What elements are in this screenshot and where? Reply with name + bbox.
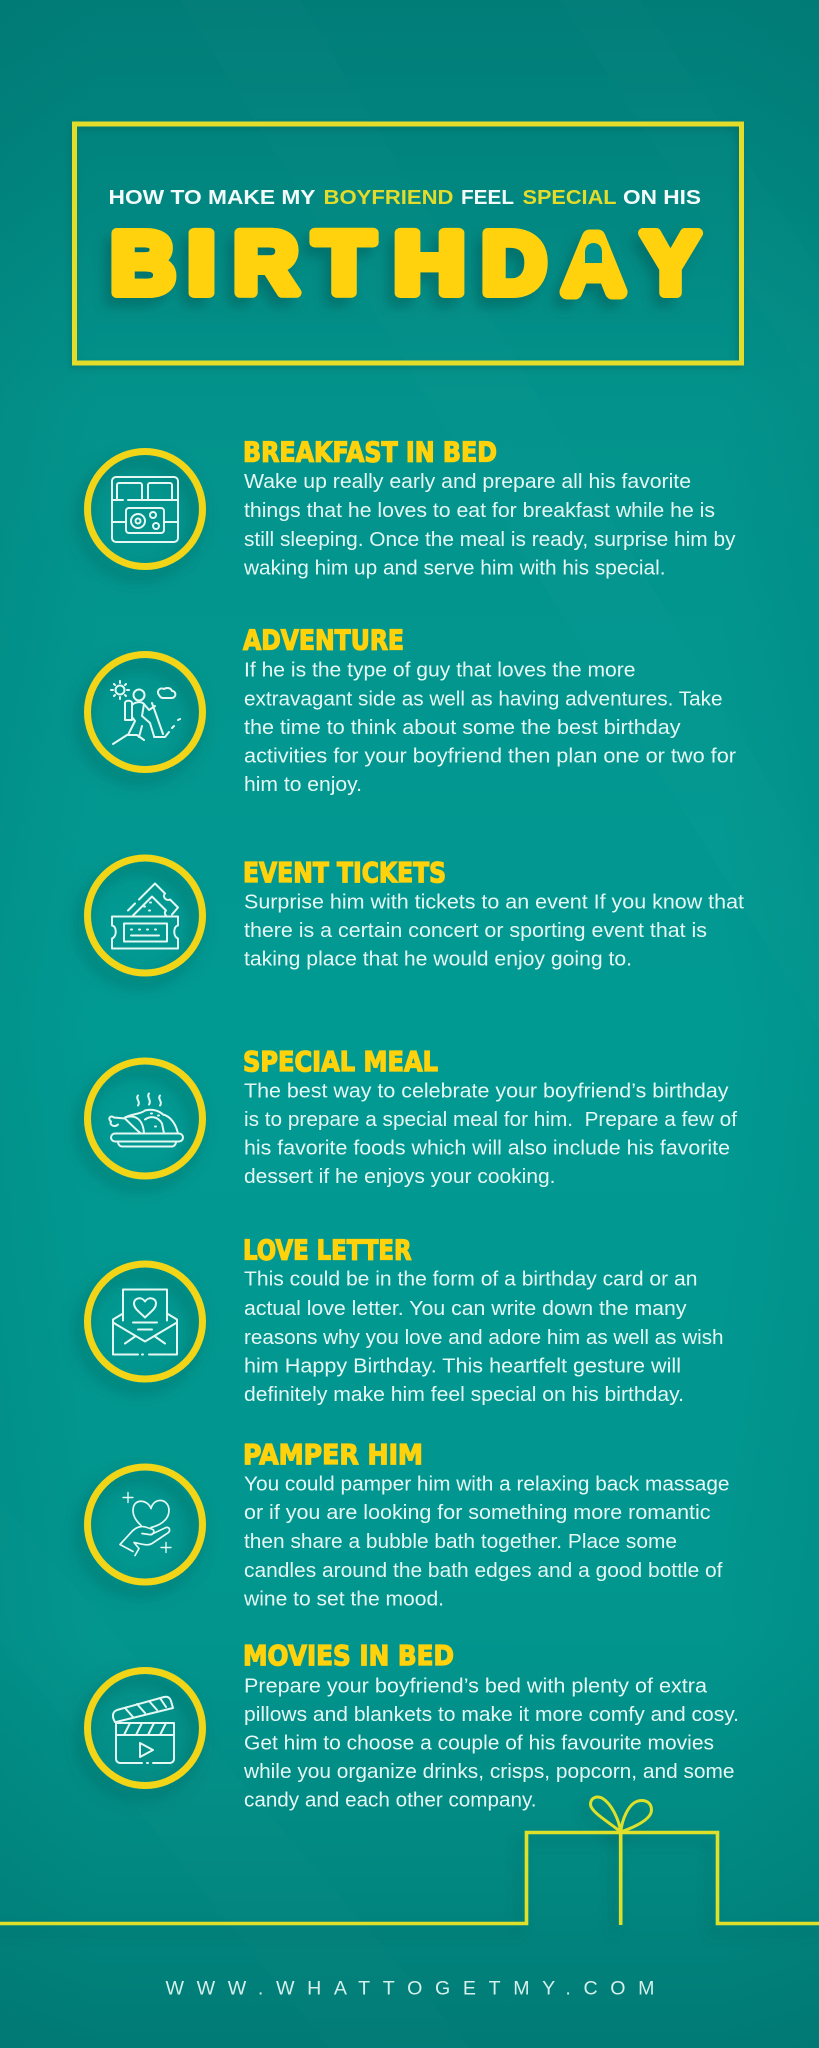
heading: BREAKFAST IN BED bbox=[243, 436, 497, 468]
panel: breakfast in bed bbox=[88, 436, 736, 580]
headline: birthday: B bbox=[111, 214, 175, 312]
body text: his favorite foods which will also include his favorite bbox=[244, 1138, 730, 1160]
heading: SPECIAL MEAL bbox=[243, 1046, 438, 1078]
subtitle: BOYFRIEND bbox=[324, 186, 454, 209]
gift bow bbox=[590, 1797, 652, 1832]
heading: EVENT TICKETS bbox=[243, 857, 446, 889]
icon: clapperboard bbox=[88, 1670, 202, 1786]
body text: him Happy Birthday. This heartfelt gesture will bbox=[244, 1356, 681, 1378]
body text: Prepare your boyfriend’s bed with plenty of extra bbox=[244, 1676, 708, 1698]
panel: love letter bbox=[88, 1234, 724, 1406]
body text: pillows and blankets to make it more comfy and cosy. bbox=[244, 1704, 739, 1726]
headline: birthday: H bbox=[394, 215, 465, 312]
body text bbox=[243, 1676, 739, 1812]
icon: roast meal bbox=[88, 1061, 202, 1176]
body text: This could be in the form of a birthday card or an bbox=[244, 1268, 698, 1290]
subtitle: FEEL bbox=[461, 186, 514, 209]
body text: taking place that he would enjoy going to. bbox=[244, 948, 632, 970]
body text: wine to set the mood. bbox=[243, 1588, 444, 1610]
body text: If he is the type of guy that loves the more bbox=[244, 660, 636, 682]
body text: activities for your boyfriend then plan one or two for bbox=[244, 746, 736, 768]
heading: MOVIES IN BED bbox=[243, 1640, 454, 1672]
body text: reasons why you love and adore him as well as wish bbox=[244, 1327, 724, 1349]
body text bbox=[244, 1080, 737, 1188]
body text: things that he loves to eat for breakfast while he is bbox=[244, 500, 715, 522]
website url: WWW.WHATTOGETMY.COM bbox=[166, 1978, 654, 2000]
headline: birthday bbox=[111, 214, 700, 312]
body text: Wake up really early and prepare all his favorite bbox=[244, 471, 691, 493]
title frame bbox=[74, 124, 742, 363]
body text: while you organize drinks, crisps, popcorn, and some bbox=[243, 1761, 734, 1783]
body text: is to prepare a special meal for him. Prepare a few of bbox=[244, 1109, 737, 1131]
heading: LOVE LETTER bbox=[243, 1234, 412, 1266]
headline: birthday: Y bbox=[641, 215, 700, 312]
headline: birthday: I bbox=[188, 214, 215, 312]
heading: ADVENTURE bbox=[243, 624, 404, 656]
body text bbox=[244, 660, 736, 796]
title box bbox=[74, 124, 742, 363]
panel: special meal bbox=[88, 1046, 737, 1188]
body text: there is a certain concert or sporting event that is bbox=[244, 920, 707, 942]
headline: birthday: T bbox=[314, 214, 374, 312]
headline: birthday: D bbox=[482, 214, 546, 312]
icon: bed with tray bbox=[88, 452, 202, 566]
panel: event tickets bbox=[88, 857, 744, 973]
body text: or if you are looking for something more romantic bbox=[244, 1502, 710, 1524]
icon: hiker bbox=[88, 654, 202, 770]
subtitle: SPECIAL bbox=[522, 186, 616, 209]
body text: then share a bubble bath together. Place some bbox=[244, 1531, 677, 1553]
heading: PAMPER HIM bbox=[243, 1439, 423, 1471]
icon: hand holding heart bbox=[88, 1467, 202, 1582]
body text: Get him to choose a couple of his favourite movies bbox=[244, 1732, 714, 1754]
body text: actual love letter. You can write down the many bbox=[244, 1298, 687, 1320]
body text: the time to think about some the best birthday bbox=[244, 717, 681, 739]
body text: candles around the bath edges and a good bottle of bbox=[244, 1560, 723, 1582]
panel: adventure bbox=[88, 624, 736, 796]
subtitle bbox=[108, 186, 701, 209]
body text: Surprise him with tickets to an event If you know that bbox=[244, 892, 744, 914]
body text: waking him up and serve him with his special. bbox=[243, 558, 666, 580]
body text: definitely make him feel special on his birthday. bbox=[244, 1384, 684, 1406]
panel: movies in bed bbox=[88, 1640, 739, 1812]
icon: envelope with heart bbox=[88, 1264, 202, 1379]
body text: extravagant side as well as having adventures. Take bbox=[244, 688, 722, 710]
icon: tickets bbox=[88, 858, 202, 973]
body text bbox=[244, 1268, 724, 1406]
body text bbox=[244, 892, 744, 970]
body text: him to enjoy. bbox=[244, 774, 362, 796]
body text: You could pamper him with a relaxing back massage bbox=[244, 1474, 730, 1496]
panel: pamper him bbox=[88, 1439, 730, 1610]
counter of letter A bbox=[585, 243, 602, 263]
body text: still sleeping. Once the meal is ready, surprise him by bbox=[244, 529, 736, 551]
headline: birthday: R bbox=[234, 214, 298, 312]
body text: dessert if he enjoys your cooking. bbox=[244, 1166, 556, 1188]
body text bbox=[243, 1474, 730, 1610]
body text: candy and each other company. bbox=[244, 1790, 536, 1812]
body text: The best way to celebrate your boyfriend’s birthday bbox=[244, 1080, 729, 1102]
subtitle: HOW TO MAKE MY bbox=[108, 186, 316, 209]
subtitle: ON HIS bbox=[623, 186, 701, 209]
gift line illustration bbox=[0, 1797, 819, 1925]
body text bbox=[243, 471, 736, 580]
headline: birthday: A bbox=[567, 220, 621, 309]
